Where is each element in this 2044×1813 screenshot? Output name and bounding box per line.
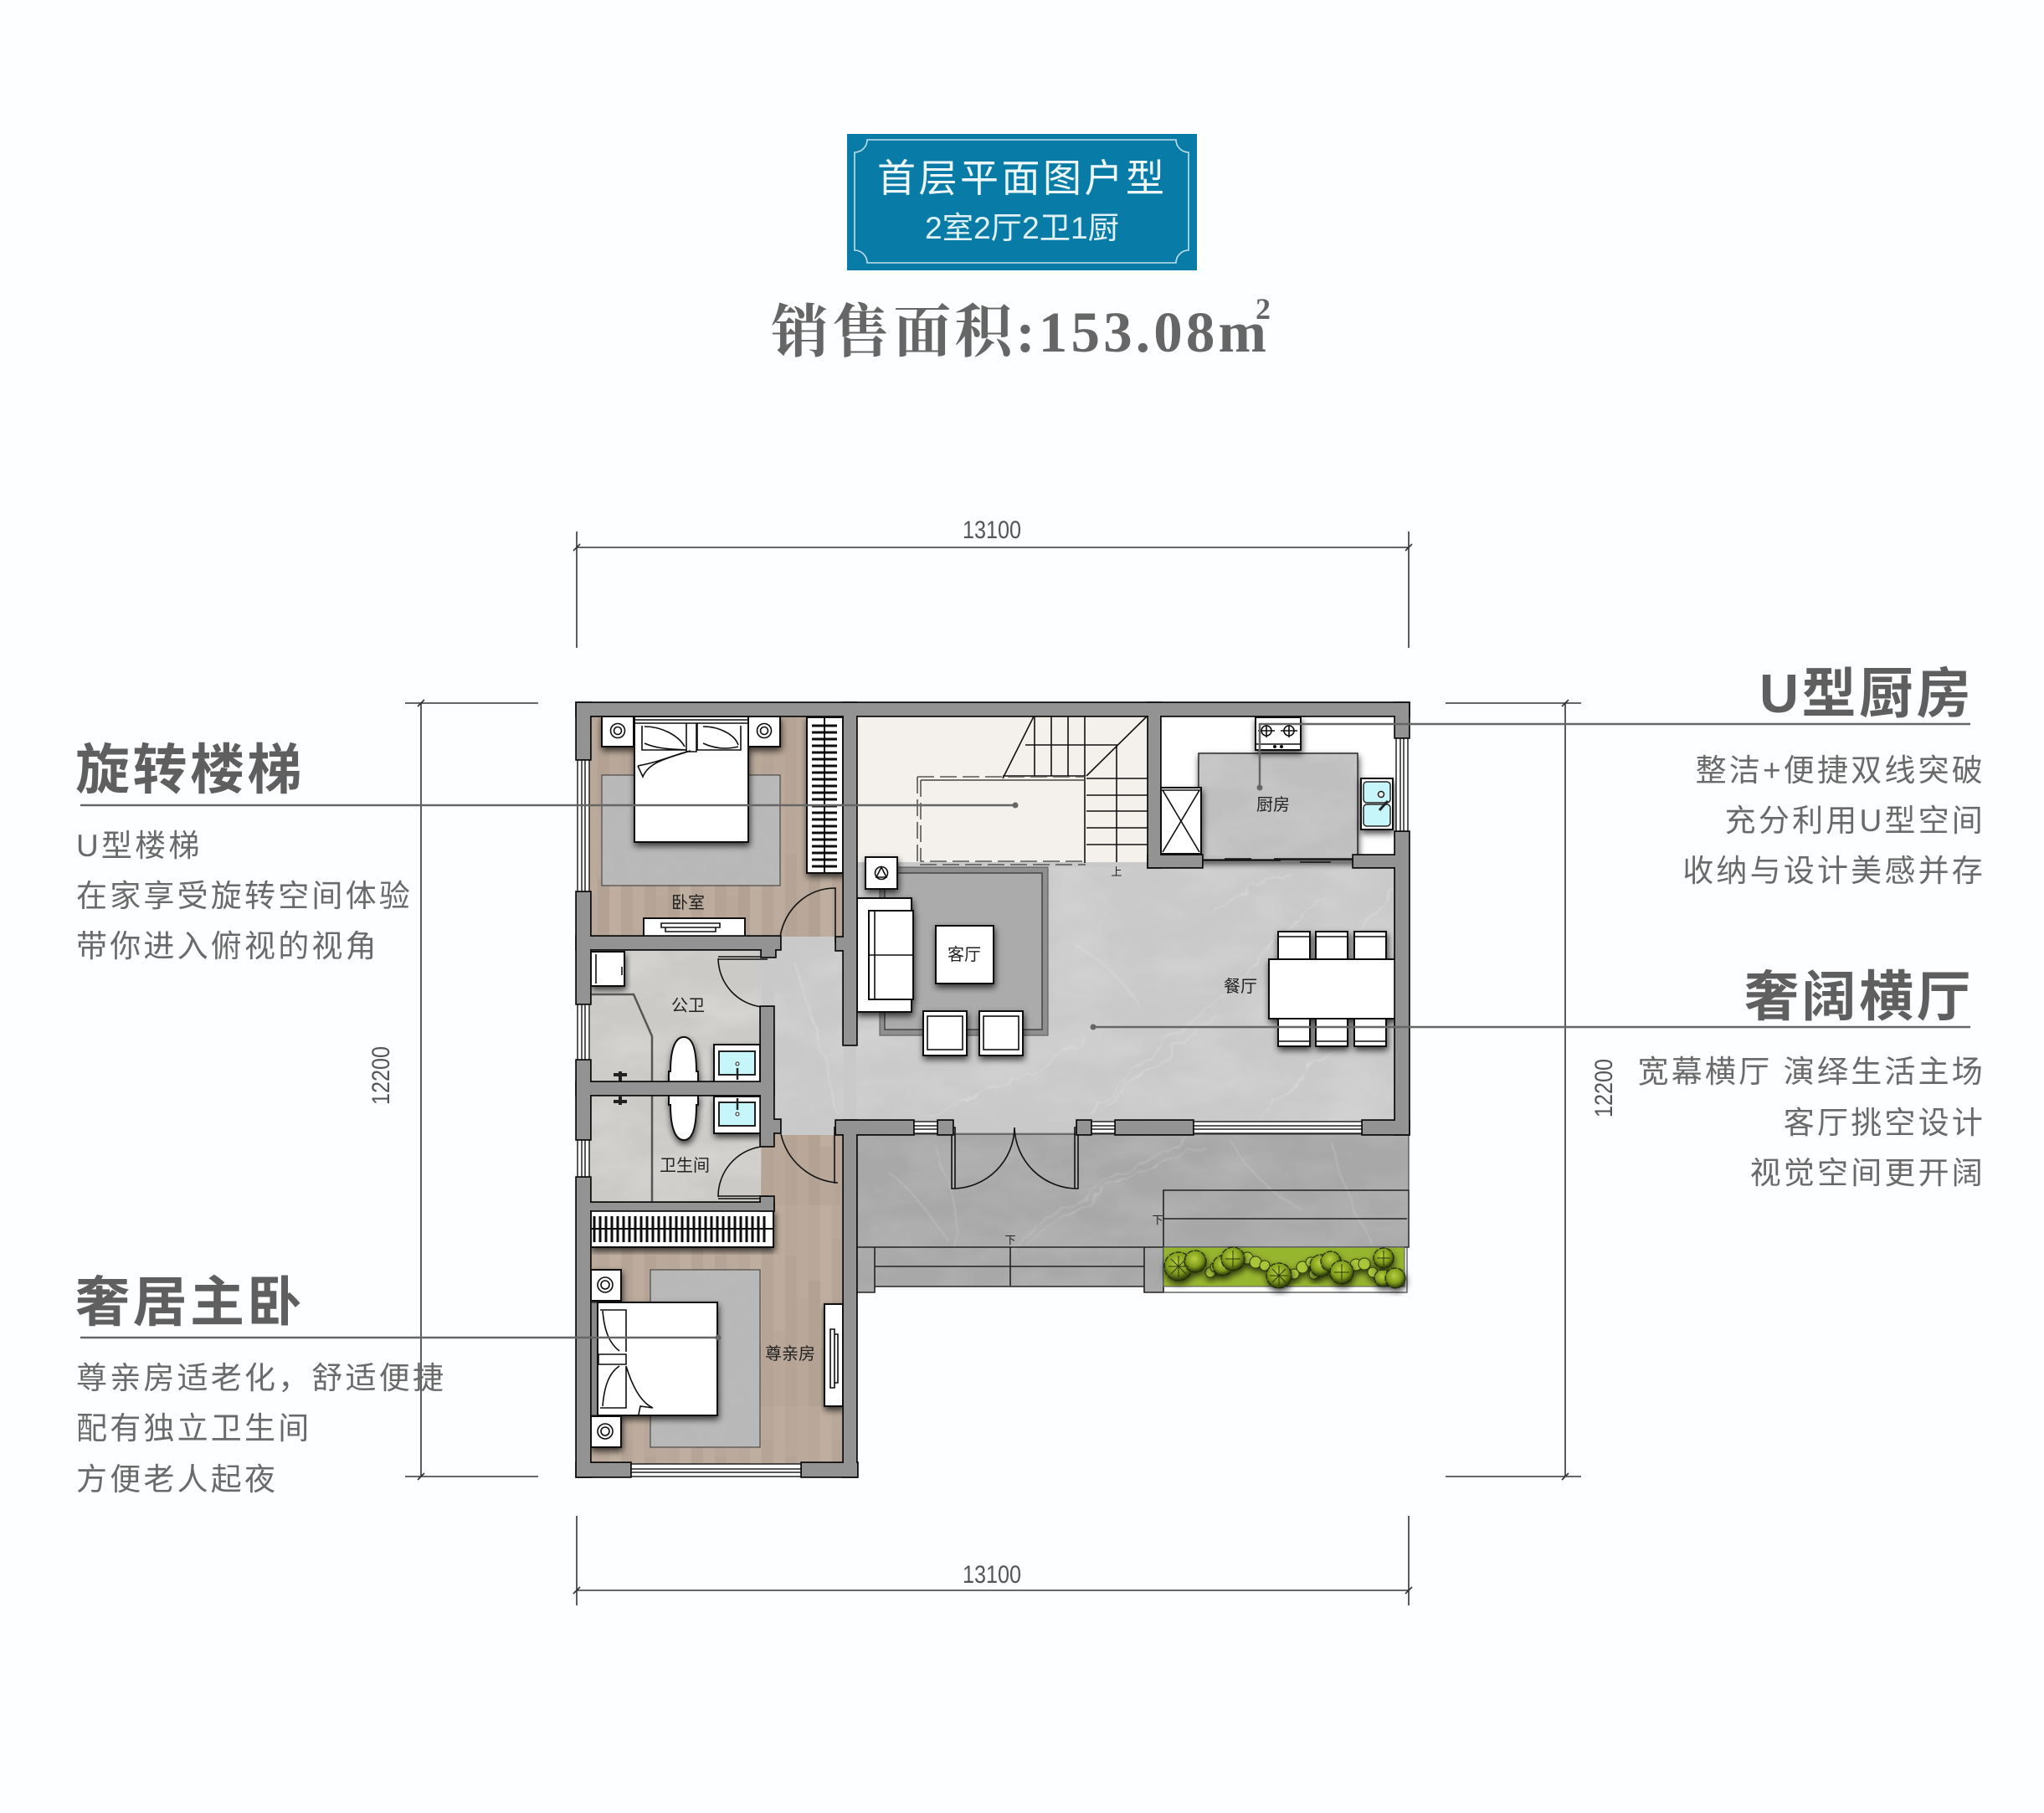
callout: spiral stairs: 在家享受旋转空间体验 [76,879,413,913]
bedroom door [780,888,835,943]
right dimension: 12200 [1590,1059,1618,1117]
double entry door [952,1127,1078,1189]
dining set [1269,932,1395,1046]
bedroom bed [602,716,780,842]
planter [1163,1247,1405,1288]
bedroom 2 door [781,1127,838,1183]
top dimension: 13100 [963,516,1021,544]
callout: master bedroom: 配有独立卫生间 [76,1411,311,1446]
room labels: 客厅 [948,945,981,964]
left dimension [367,700,538,1480]
windows [578,737,1408,1477]
callout: wide living hall: 宽幕横厅 演绎生活主场 [1638,1055,1985,1089]
room labels: 尊亲房 [765,1344,815,1364]
callout: U-shaped kitchen: U型厨房 [1759,663,1974,724]
stairs: 上 [1111,865,1122,878]
callout: master bedroom: 奢居主卧 [75,1271,305,1333]
terrace stairs: 下 [1152,1214,1163,1226]
bathroom fixtures [590,952,768,1203]
callout: spiral stairs [75,739,1018,963]
stairs [917,716,1148,878]
terrace stairs: 下 [1004,1234,1016,1246]
living room rug [880,867,1048,1035]
callout: U-shaped kitchen: 充分利用U型空间 [1725,804,1985,838]
top dimension [573,516,1412,648]
callout: U-shaped kitchen [1257,663,1985,888]
sales area heading: 销售面积:153.08m [771,300,1266,364]
living room furniture [857,857,1023,1055]
callout: U-shaped kitchen: 收纳与设计美感并存 [1682,854,1985,888]
bottom dimension [573,1516,1412,1605]
callout: spiral stairs: 带你进入俯视的视角 [76,929,379,963]
callout: wide living hall: 客厅挑空设计 [1784,1106,1985,1140]
bedroom 2 rug [650,1270,760,1447]
callout: wide living hall: 视觉空间更开阔 [1750,1156,1985,1190]
callout: master bedroom: 方便老人起夜 [76,1462,278,1497]
walls [577,703,1409,1477]
floors [586,711,1409,1466]
bedroom rug [602,775,780,886]
callout: spiral stairs: 旋转楼梯 [75,739,305,800]
callout: U-shaped kitchen: 整洁+便捷双线突破 [1696,753,1985,788]
title banner [847,134,1197,270]
callout: master bedroom: 尊亲房适老化，舒适便捷 [76,1361,446,1395]
kitchen [1154,717,1393,862]
bedroom wardrobe [807,717,843,873]
callout: spiral stairs: U型楼梯 [76,829,203,863]
title banner: 2室2厅2卫1厨 [925,211,1119,245]
callout: wide living hall: 奢阔横厅 [1744,966,1974,1027]
room labels [660,795,1290,1364]
callout: wide living hall [1090,966,1985,1190]
bedroom 2 tv cabinet [824,1304,843,1406]
right dimension [1446,700,1618,1480]
bedroom tv stand [644,918,745,937]
left dimension: 12200 [367,1046,395,1105]
terrace stairs [856,1134,1409,1292]
room labels: 餐厅 [1224,977,1257,996]
callout: master bedroom [75,1271,722,1497]
room labels: 公卫 [671,997,705,1015]
floor plan [577,703,1409,1477]
bedroom 2 wardrobe [591,1210,773,1247]
title banner: 首层平面图户型 [877,157,1167,200]
room labels: 卧室 [671,893,705,912]
room labels: 卫生间 [660,1156,710,1175]
bedroom 2 bed [591,1270,717,1447]
sales area heading: 2 [1256,292,1271,326]
room labels: 厨房 [1256,795,1290,814]
bottom dimension: 13100 [963,1561,1021,1589]
